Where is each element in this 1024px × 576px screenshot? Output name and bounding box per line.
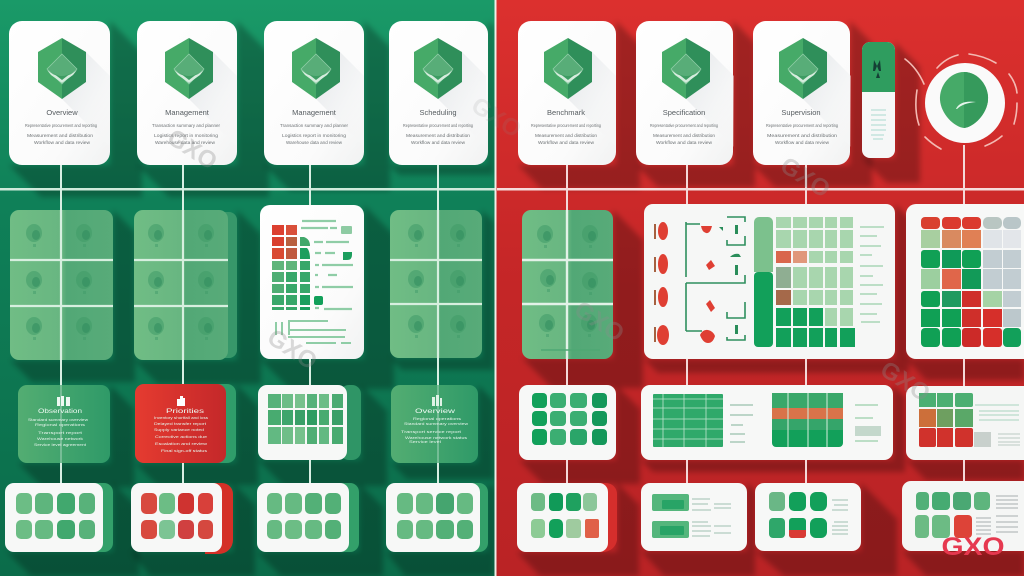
note text: Service level [409,440,441,444]
red markers [654,222,715,345]
note text: Transport service report [401,430,462,434]
note text: Warehouse network [37,437,83,441]
card 7 text: Supervision [781,108,821,117]
note text: Priorities [166,409,204,415]
card 5 text: Representative procurement and reporting [531,123,602,128]
card 1 text: Workflow and data review [34,140,91,145]
card 3 text: Warehouse data and review [286,140,343,145]
note text: Inventory shortfall and loss [154,416,208,420]
card 6 text [650,108,719,145]
icon: small bars [177,396,185,406]
row 4: red side card 3 [755,483,861,551]
note text: Standard summary overview [28,418,88,422]
watermark: GXO: GXO [775,152,835,204]
row 4: card 3 [257,483,359,552]
card 4 text [403,108,474,145]
note text [28,409,88,447]
matrix tiles [754,217,773,272]
watermark: GXO: GXO [569,296,629,348]
ring arcs [905,54,1017,149]
card 3 text: Management [292,108,337,117]
row 4: card 4 [386,483,488,552]
top card 5 [518,21,616,165]
note text: Final sign-off status [161,449,207,453]
top card 4 [389,21,488,165]
watermark: GXO: GXO [875,356,935,408]
row labels [276,221,353,343]
note text [154,409,208,453]
narrow tag card [862,42,895,158]
card 3 text: Logistics report in monitoring [282,133,347,138]
icon: tag glyph [873,60,881,78]
icon: hexagon shield [779,38,851,147]
table 2 [772,393,843,447]
row 3: red side tile card [519,385,616,460]
card 4 text: Workflow and data review [411,140,466,145]
note text: Regional operations [413,417,461,421]
connectors behind cards [61,145,964,485]
row 4: card 1 [5,483,113,552]
icon: hexagon shield [38,38,110,147]
card 7 text: Measurement and distribution [767,133,838,138]
panel: white data sheet [260,205,364,359]
card 4 text: Scheduling [419,108,457,117]
panel: icon grid 1 [10,210,113,360]
card 5 text: Workflow and data review [538,140,595,145]
note text: Observation [38,409,82,415]
top card 3 [264,21,364,165]
icon: hexagon shield [292,38,364,147]
card 5 text: Measurement and distribution [535,133,598,138]
note text: Transport report [38,431,84,435]
row 3: red note card [135,384,236,463]
card 1 text: Measurement and distribution [27,133,94,138]
card 7 text [766,108,839,145]
card 2 text: Warehouse data and review [155,140,216,145]
card 3 text [280,108,349,145]
note text: Standard summary overview [404,422,468,426]
note text: Regional operations [35,423,85,427]
card 6 text: Specification [663,108,705,117]
row 3: green note card 1 [18,385,110,463]
row 4: right card [902,481,1024,551]
heat table [272,225,310,310]
icon: hexagon shield [662,38,734,147]
background: green half [0,0,495,576]
row 4: red side card 1 [517,483,617,552]
row 3: white table card [258,385,361,460]
card 6 text: Representative procurement and reporting [650,123,719,128]
card 4 text: Representative procurement and reporting [403,123,474,128]
row 4: red side card 2 [641,483,747,551]
row 3: right card [906,386,1024,460]
watermark: GXO: GXO [162,124,222,176]
card 3 text: Transaction summary and planner [280,123,349,128]
note text: Supply variance noted [154,428,204,432]
card 2 text [152,108,221,145]
horizontal rule [0,188,1024,190]
card 2 text: Transaction summary and planner [152,123,221,128]
top card 2 [137,21,237,165]
card 1 text: Overview [46,108,78,117]
card 2 text: Management [165,108,210,117]
background: red half [495,0,1024,576]
panel: icon grid 2 [134,210,237,360]
note text: Corrective actions due [155,435,207,439]
bracket flow lines [686,217,745,340]
icon: hexagon shield [544,38,616,147]
icon: hexagon shield [414,38,486,147]
card 1 text: Representative procurement and reporting [25,123,98,128]
panel: wide white matrix [644,204,895,359]
note text: Overview [415,409,456,415]
row 3: wide table card [641,385,893,460]
card 5 text: Benchmark [547,108,585,117]
watermark: GXO: GXO [262,324,322,376]
card 6 text: Workflow and data review [656,140,713,145]
logo: GXO: GXO [942,533,1004,561]
top card 1 [9,21,110,165]
note text: Warehouse network status [405,436,467,440]
icon: leaf [940,72,988,128]
panel: right heat matrix [906,204,1024,359]
top card 6 [636,21,734,165]
panel: icon grid on red side [522,210,613,359]
top card 7 [753,21,851,165]
card 6 text: Measurement and distribution [653,133,716,138]
legend bars [860,227,884,322]
note text [401,409,468,444]
row 4: card 2 [131,483,233,554]
note text: Service level agreement [34,443,87,447]
circular badge [905,54,1017,149]
card 1 text [25,108,98,145]
watermark: GXO: GXO [466,92,526,144]
table 1 [653,394,723,447]
icon: hexagon shield [165,38,237,147]
card 7 text: Representative procurement and reporting [766,123,839,128]
green chips [341,226,352,234]
note text: Delayed transfer report [154,422,207,426]
card 7 text: Workflow and data review [775,140,830,145]
tile table [268,394,343,444]
card 4 text: Measurement and distribution [406,133,471,138]
note text: Escalation and review [155,442,207,446]
panel: icon grid 3 [390,210,482,358]
icon: small bars [57,396,70,406]
row 3: green note card 2 [391,385,478,463]
centre divider [494,0,496,576]
card 2 text: Logistics report in monitoring [154,133,219,138]
card 5 text [531,108,602,145]
icon: small bars [432,395,442,406]
